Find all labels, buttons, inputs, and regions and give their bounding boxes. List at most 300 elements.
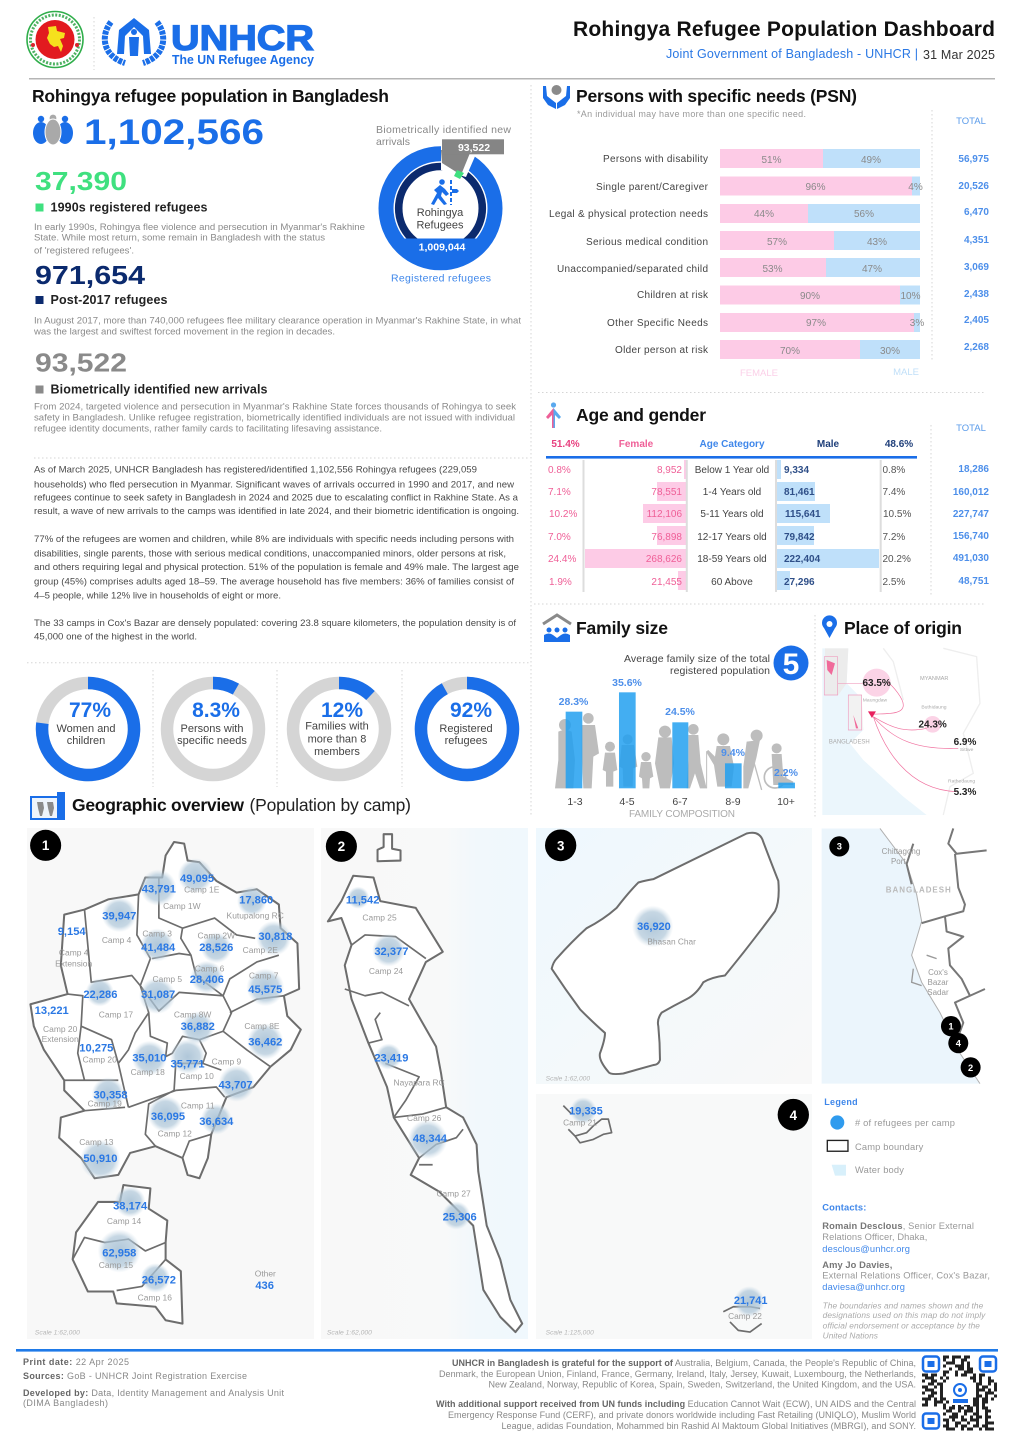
camp population numbers: 17,860 [239,894,273,906]
new arrivals: 93,522 [35,348,127,378]
axis labels [567,796,795,808]
camp labels: Camp 15 [99,1260,133,1270]
camp population numbers: 35,771 [171,1058,205,1070]
map panel 1: main camps: Scale 1:62,000 [35,1329,80,1336]
camp labels [362,912,471,1199]
footer acknowledgements: League, adidas Foundation, Mohammed bin Rashid Al Maktoum Global Initiatives (MBRGI), and SONY. [502,1421,916,1431]
donut: registered refugees [421,683,513,775]
heading: geographic overview: Geographic overview [72,795,244,815]
bar value labels [559,677,799,779]
bar value labels: 9.4% [721,747,746,759]
totals: 2,405 [964,315,989,326]
age totals: 18,286 [958,464,989,475]
disclaimer [823,1300,986,1341]
text block: narrative [34,465,519,642]
contacts: daviesa@unhcr.org [822,1281,905,1292]
donut: refugee composition: Rohingya [417,207,464,219]
icon: gender figure [546,402,561,428]
footer sources: Print date: 22 Apr 2025 [23,1357,129,1367]
table header: 48.6% [885,439,913,450]
camp population numbers: 28,406 [190,974,224,986]
age categories [695,465,769,588]
panel: persons with specific needs [543,85,989,379]
text block: narrative: disabilities, single parents, those with serious medical conditions, unaccompanied minors, older persons at risk, [34,549,506,560]
panel: age and gender: TOTAL [956,423,986,434]
post-2017 refugees [33,260,521,337]
male rows: 115,641 [785,509,821,520]
panel: persons with specific needs: FEMALE [740,368,778,379]
text block: narrative: 4–5 people, while 12% live in households of eight or more. [34,590,281,601]
map panel 4: camps 21 and 22: Scale 1:125,000 [546,1329,594,1336]
contacts: Romain Desclous, Senior External [822,1220,974,1231]
female rows: 24.4% [548,554,576,565]
axis labels: 4-5 [619,796,635,808]
new arrivals: From 2024, targeted violence and persecution in Myanmar's Rakhine State forces thousands of Rohingya to seek [34,401,516,412]
badge 1: 1 [42,838,50,853]
panel: age and gender [546,402,989,595]
1990s registered refugees: 37,390 [35,166,127,196]
camp labels: Camp 27 [436,1189,471,1199]
camp population numbers: 50,910 [83,1153,117,1165]
text block: narrative: 77% of the refugees are women and children, while 8% are individuals with specific needs including persons with [34,534,514,545]
logo: UNHCR emblem and wordmark: The UN Refugee Agency [172,53,314,67]
camp labels: Camp 4 [59,948,89,958]
male rows: 0.8% [882,465,905,476]
bar labels: Children at risk [637,290,709,301]
donut: refugee composition: 1,009,044 [419,242,466,254]
contacts: Relations Officer, Dhaka, [822,1231,927,1242]
camp labels: Camp 8E [244,1021,280,1031]
donut: registered refugees: 92% [450,699,492,722]
camp population numbers: 45,575 [248,984,282,996]
axis labels: 10+ [777,796,795,808]
text block: narrative: households) who fled persecution in Myanmar. Significant waves of arrivals occurred in 1990 and 2017, and new [34,479,514,490]
inset locator map: BANGLADESH [886,886,951,895]
panel: age and gender: Age and gender [576,405,706,425]
donut: specific needs: specific needs [177,735,247,747]
camp population numbers: 11,542 [346,894,379,906]
camp labels: Camp 2E [243,945,278,955]
origin map: 63.5% [862,678,891,689]
inset locator map: 2 [968,1062,973,1073]
camp labels: Camp 17 [99,1009,133,1019]
post-2017 refugees: 971,654 [35,260,146,290]
bar labels: Single parent/Caregiver [596,182,709,193]
age totals: 160,012 [953,487,989,498]
donut: large families: 12% [321,699,363,722]
camp labels: Camp 7 [249,971,279,981]
contacts [822,1202,990,1292]
camp population numbers: 13,221 [35,1005,69,1017]
bar labels: Legal & physical protection needs [549,209,708,220]
footer sources: Sources: GoB - UNHCR Joint Registration Exercise [23,1371,247,1381]
bar value labels: 24.5% [665,706,696,718]
axis labels: 8-9 [725,796,741,808]
camp labels: Camp 10 [180,1071,214,1081]
text block: narrative: 45,000 one of the highest in the world. [34,631,197,642]
logo: Government of Bangladesh [27,12,83,68]
camp population numbers: 31,087 [141,989,175,1001]
bar value labels: 2.2% [774,767,799,779]
camp labels: Camp 26 [407,1113,442,1123]
disclaimer: The boundaries and names shown and the [823,1300,984,1310]
camp labels: Camp 8W [174,1009,211,1019]
camp population numbers: 30,818 [258,931,293,943]
silhouettes of family members [555,713,793,790]
camp population numbers: 36,462 [248,1036,282,1048]
male rows: 79,842 [784,532,815,543]
camp population numbers: 28,526 [199,942,233,954]
totals: 2,268 [964,342,989,353]
map panel 4: camps 21 and 22: 4 [790,1108,798,1123]
camp labels: Camp 25 [362,912,397,922]
camp population numbers: 41,484 [141,942,176,954]
icon: people [33,115,73,145]
population bars [584,460,881,592]
panel: family size: Average family size of the total [624,653,770,665]
bar labels: Older person at risk [615,345,709,356]
totals [958,154,989,353]
footer sources: Developed by: Data, Identity Management and Analysis Unit [23,1388,284,1398]
header logos [27,12,314,70]
camp labels: Camp 18 [131,1067,165,1077]
panel: family size: Family size [576,618,668,638]
camp labels: Camp 11 [181,1101,215,1111]
origin map: Rathedaung [948,779,975,785]
inset locator map: Sadar [927,988,949,997]
bar labels [549,154,709,356]
stacked bars: 70% [780,346,800,357]
age categories: 1-4 Years old [703,487,761,498]
inset locator map: 1 [948,1020,954,1032]
donut: specific needs [167,683,259,775]
inset locator map: Chittagong [882,847,920,856]
camp labels [42,884,284,1303]
bar labels: Persons with disability [603,154,708,165]
1990s registered refugees: In early 1990s, Rohingya flee violence and persecution in Myanmar's Rakhine [34,222,365,233]
total population figure: 1,102,566 [84,113,264,152]
legend: Camp boundary [855,1141,924,1152]
callout: average family size [774,646,808,681]
map panel 3: Bhasan Char: Scale 1:62,000 [546,1075,590,1082]
map panel 4: camps 21 and 22: Camp 22 [728,1311,762,1321]
donut: refugee composition: Refugees [416,219,464,231]
1990s registered refugees: State. While most return, some remain in Bangladesh with the status [34,233,325,244]
icon: family under roof [543,615,571,642]
bars [566,692,795,788]
new arrivals: Biometrically identified new arrivals [50,383,268,397]
panel: persons with specific needs: MALE [893,367,919,378]
icon: map [31,792,65,819]
totals: 2,438 [964,289,989,300]
age categories: 60 Above [711,577,753,588]
heading: population: Rohingya refugee population in Bangladesh [32,86,389,106]
donut: large families [293,683,385,775]
age categories: 12-17 Years old [697,532,767,543]
camp labels: Nayapara RC [394,1077,445,1087]
new arrivals: safety in Bangladesh. Unlike refugee registration, biometrically identified individuals are not issued with individual [34,413,515,424]
origin map: Buthidaung [921,705,947,711]
text block: narrative: and others requiring legal and physical protection. 51% of the population is female and 49% male. The largest age [34,562,519,573]
stacked bars: 4% [908,182,923,193]
donut: women and children [42,683,134,775]
camp population numbers: 36,095 [151,1111,185,1123]
donut: large families: members [314,746,360,758]
donut: refugee composition: arrivals [376,136,410,148]
stacked bars: 49% [861,155,881,166]
stacked bars: 43% [867,237,887,248]
bar value labels: 35.6% [612,677,643,689]
badge 1 [30,830,61,861]
male rows [784,465,911,588]
camp population numbers: 32,377 [374,946,408,958]
stacked bars: 53% [762,264,783,275]
age totals: 227,747 [953,509,989,520]
map panel 3: Bhasan Char: Bhasan Char [647,937,696,947]
footer acknowledgements: New Zealand, Norway, Republic of Korea, Spain, Sweden, Switzerland, the United Kingdom, and the USA. [488,1380,916,1390]
dashboard title: Rohingya Refugee Population Dashboard [573,18,995,41]
age categories: 18-59 Years old [697,554,767,565]
logo: UNHCR emblem and wordmark [105,18,314,67]
camp boundaries south [73,1185,183,1324]
camp population numbers: 9,154 [58,926,86,938]
logo: UNHCR emblem and wordmark: UNHCR [171,19,314,58]
origin map: Sittwe [960,747,974,753]
contacts: Contacts: [822,1202,866,1213]
donut: refugee composition [376,124,511,285]
axis labels: 6-7 [672,796,688,808]
female rows: 76,898 [651,532,682,543]
camp population numbers: 43,791 [142,883,176,895]
table header: Male [817,439,840,450]
post-2017 refugees: In August 2017, more than 740,000 refugees flee military clearance operation in Myanmar's Rakhine State, in what [34,315,521,326]
camp labels: Extension [42,1034,79,1044]
camp population numbers: 39,947 [102,910,136,922]
panel: persons with specific needs: Persons with specific needs (PSN) [576,86,857,106]
map panel 4: camps 21 and 22 [536,1094,812,1339]
camp labels: Kutupalong RC [227,910,284,920]
totals: 3,069 [964,262,989,273]
map panel 4: camps 21 and 22: Camp 21 [563,1117,597,1128]
1990s registered refugees: of 'registered refugees'. [34,245,134,256]
callout: average family size: 5 [783,648,799,681]
age totals: 48,751 [958,576,989,587]
inset locator map: 3 [837,841,842,852]
origin map: 5.3% [954,787,976,798]
donut: large families: more than 8 [308,734,366,746]
stacked bars: 96% [805,182,826,193]
camp labels: Camp 19 [88,1098,122,1108]
new arrivals: refugee identity documents, rather family cards to facilitating lifesaving assistance. [34,424,382,435]
map panel 3: Bhasan Char: 36,920 [637,921,671,933]
bar value labels: 28.3% [559,696,589,708]
donut: refugee composition: 93,522 [458,142,490,154]
camp labels: Camp 16 [138,1293,172,1303]
female rows: 268,626 [646,554,682,565]
footer sources [23,1357,284,1408]
female rows: 1.9% [549,577,572,588]
inset locator map: 4 [956,1037,962,1048]
map panel 3: Bhasan Char [536,828,812,1084]
age totals: 491,030 [953,553,989,564]
camp population numbers: 49,095 [180,873,214,885]
stacked bars: 30% [880,346,900,357]
donut: specific needs: 8.3% [192,699,240,722]
panel: persons with specific needs: TOTAL [956,116,986,127]
male rows: 9,334 [784,465,809,476]
donut: women and children: children [67,735,105,747]
icon: hands [543,85,570,109]
camp population numbers: 22,286 [83,989,117,1001]
contacts: desclous@unhcr.org [822,1243,910,1254]
inset locator map: Bazar [928,978,949,987]
bar labels: Other Specific Needs [607,318,708,329]
text block: narrative: result, a wave of new arrivals to the camps was identified in late 2024, and their biometric identification is ongoing. [34,506,519,517]
QR code [922,1356,997,1429]
origin map: BANGLADESH [829,739,870,745]
totals: 6,470 [964,207,989,218]
camp labels: Camp 24 [369,966,403,976]
text block: narrative: The 33 camps in Cox's Bazar are densely populated: covering 23.8 square kilometers, the population density is of [34,618,516,629]
camp labels: Camp 5 [153,974,182,984]
stacked bars: 90% [800,291,820,302]
footer acknowledgements: Denmark, the European Union, Finland, France, Germany, Ireland, Italy, Jersey, Kuwait, Luxembourg, the Netherlands, [439,1369,916,1379]
legend: # of refugees per camp [855,1117,955,1128]
male rows: 2.5% [882,577,905,588]
female rows: 112,106 [647,509,682,520]
icon: running person [431,179,459,205]
camp labels: Extension [55,958,93,968]
age categories: Below 1 Year old [695,465,769,476]
footer [16,1349,998,1431]
legend and contacts [822,1097,990,1341]
female rows: 10.2% [549,509,577,520]
camp labels: Camp 3 [142,928,172,938]
footer acknowledgements: Emergency Response Fund (CERF), and private donors worldwide including Fast Retailing (UNIQLO), Muslim World [448,1410,916,1420]
camp population numbers: 43,707 [219,1079,253,1091]
footer acknowledgements: UNHCR in Bangladesh is grateful for the support of Australia, Belgium, Canada, the People's Republic of China, [452,1358,916,1368]
inset locator map [822,827,987,1085]
totals: 20,526 [958,181,989,192]
stacked bars [720,149,924,359]
origin map: Maungdaw [863,697,888,703]
male rows: 222,404 [784,554,821,565]
population bubbles [80,858,291,1293]
camp population numbers: 25,306 [443,1212,477,1224]
male rows: 81,461 [784,487,815,498]
camp labels: Camp 2W [198,931,235,941]
camp labels: Camp 4 [102,935,132,945]
axis labels: 1-3 [567,796,583,808]
legend: Legend [824,1097,858,1107]
disclaimer: designations used on this map do not imply [823,1310,986,1320]
male rows: 10.5% [883,509,911,520]
stacked bars: 47% [862,264,882,275]
female rows: 21,455 [651,577,682,588]
badge 2: 2 [338,839,345,854]
camp population numbers: 23,419 [374,1052,408,1064]
stacked bars: 57% [767,237,787,248]
camp labels: Camp 1E [184,884,220,894]
post-2017 refugees: was the largest and swiftest forced movement in the region in decades. [33,326,335,337]
origin map [822,648,980,815]
camp population numbers [35,873,293,1292]
badge 2 [326,831,357,862]
male rows: 27,296 [784,577,815,588]
new arrivals [34,348,516,435]
totals: 56,975 [958,154,989,165]
heading: geographic overview: (Population by camp) [250,795,411,815]
text block: narrative: refugees continue to seek safety in Bangladesh in 2024 and 2025 due to escalating conflict in Rakhine State. As a [34,493,519,504]
stacked bars: 51% [761,155,782,166]
camp labels: Camp 12 [158,1129,192,1139]
1990s registered refugees [34,166,365,256]
female rows: 78,551 [651,487,682,498]
camp population numbers: 26,572 [142,1275,176,1287]
camp labels: Camp 20 [83,1054,117,1064]
camp population numbers: 436 [255,1280,274,1292]
donut: refugee composition: Biometrically identified new [376,124,511,136]
camp population numbers: 35,010 [132,1052,166,1064]
camp labels: Camp 9 [212,1057,242,1067]
female rows: 7.0% [548,532,571,543]
text block: narrative: group (45%) comprises adults aged 18–59. The average household has five members: 36% of families consist of [34,576,514,587]
camp labels: Camp 20 [43,1024,78,1034]
male rows: 7.4% [882,487,905,498]
origin map: 24.3% [918,720,947,731]
table header [551,439,913,450]
camp population numbers: 36,882 [181,1021,215,1033]
map panel 3: Bhasan Char: 3 [557,838,564,853]
disclaimer: United Nations [823,1330,879,1341]
population bubbles [347,887,470,1230]
stacked bars: 3% [910,318,924,329]
female rows [548,465,682,588]
female rows: 7.1% [548,487,571,498]
contacts: External Relations Officer, Cox's Bazar, [822,1270,990,1281]
camp labels: Other [255,1269,276,1279]
stacked bars: 10% [900,291,921,302]
stacked bars: 97% [806,318,826,329]
camp labels: Camp 13 [79,1137,114,1147]
camp population numbers: 38,174 [113,1200,148,1212]
camp population numbers: 10,275 [79,1043,113,1055]
camp labels: Camp 14 [107,1216,141,1226]
donut: registered refugees: Registered [439,723,493,735]
donut: refugee composition: Registered refugees [391,273,491,285]
bar labels: Unaccompanied/separated child [557,264,708,275]
dashboard title: 31 Mar 2025 [923,48,995,62]
map panel 1: main camps [27,828,314,1339]
footer sources: (DIMA Bangladesh) [23,1398,108,1408]
camp population numbers: 62,958 [102,1248,136,1260]
donut: registered refugees: refugees [445,735,488,747]
table header: 51.4% [551,439,580,450]
age categories: 5-11 Years old [700,509,764,520]
origin map: 6.9% [954,737,976,748]
dashboard title: Joint Government of Bangladesh - UNHCR | [666,47,918,61]
age totals [953,464,989,587]
map panel 4: camps 21 and 22: 21,741 [734,1295,767,1307]
camp population numbers: 48,344 [413,1133,448,1145]
camp population numbers [346,894,477,1224]
male rows: 20.2% [882,554,911,565]
inset locator map: Cox's [928,968,948,977]
panel: family size [543,615,808,820]
camp labels: Camp 1W [163,901,201,911]
panel: population summary [32,86,521,435]
disclaimer: official endorsement or acceptance by the [823,1321,980,1331]
